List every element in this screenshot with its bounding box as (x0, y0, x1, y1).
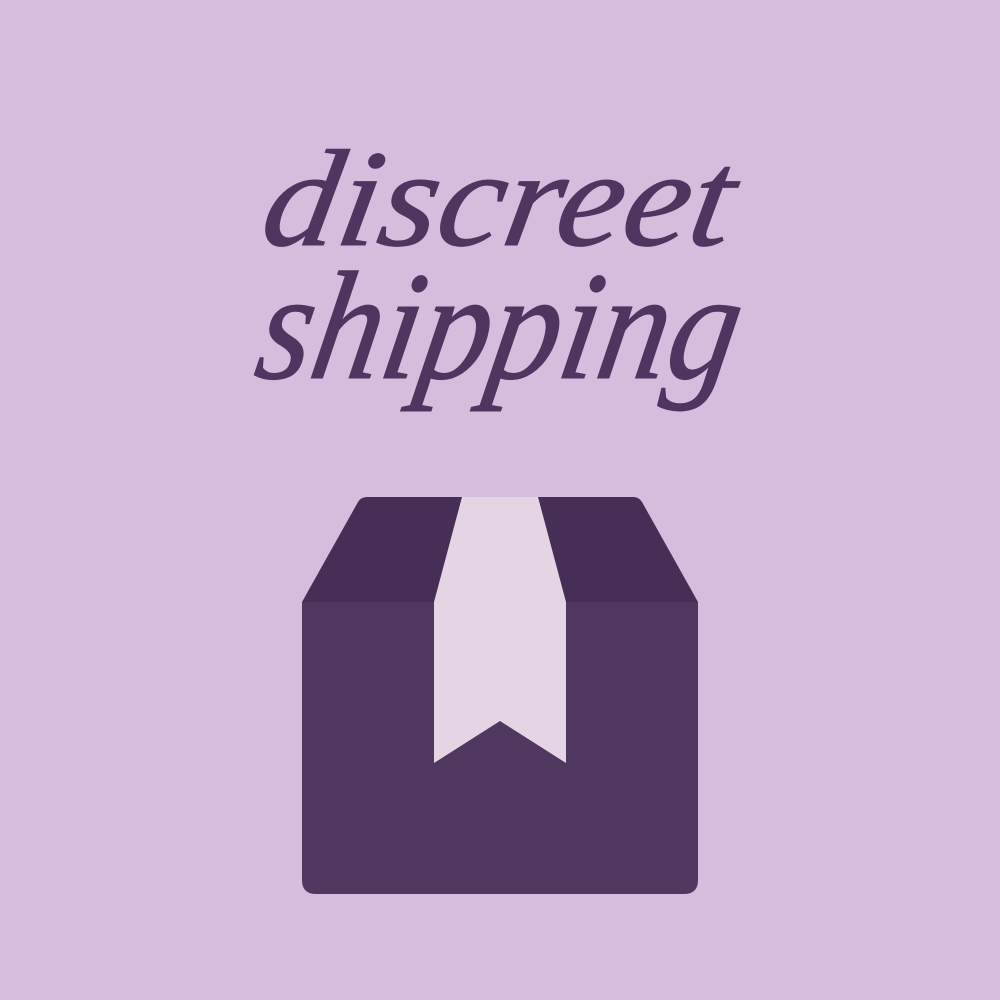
title line: shipping: shipping (246, 240, 756, 411)
title (246, 123, 756, 411)
icon: package box (302, 497, 698, 894)
box body (302, 602, 698, 894)
title line: discreet: discreet (253, 123, 751, 276)
box lid (302, 497, 698, 602)
packing tape ribbon (434, 497, 566, 763)
